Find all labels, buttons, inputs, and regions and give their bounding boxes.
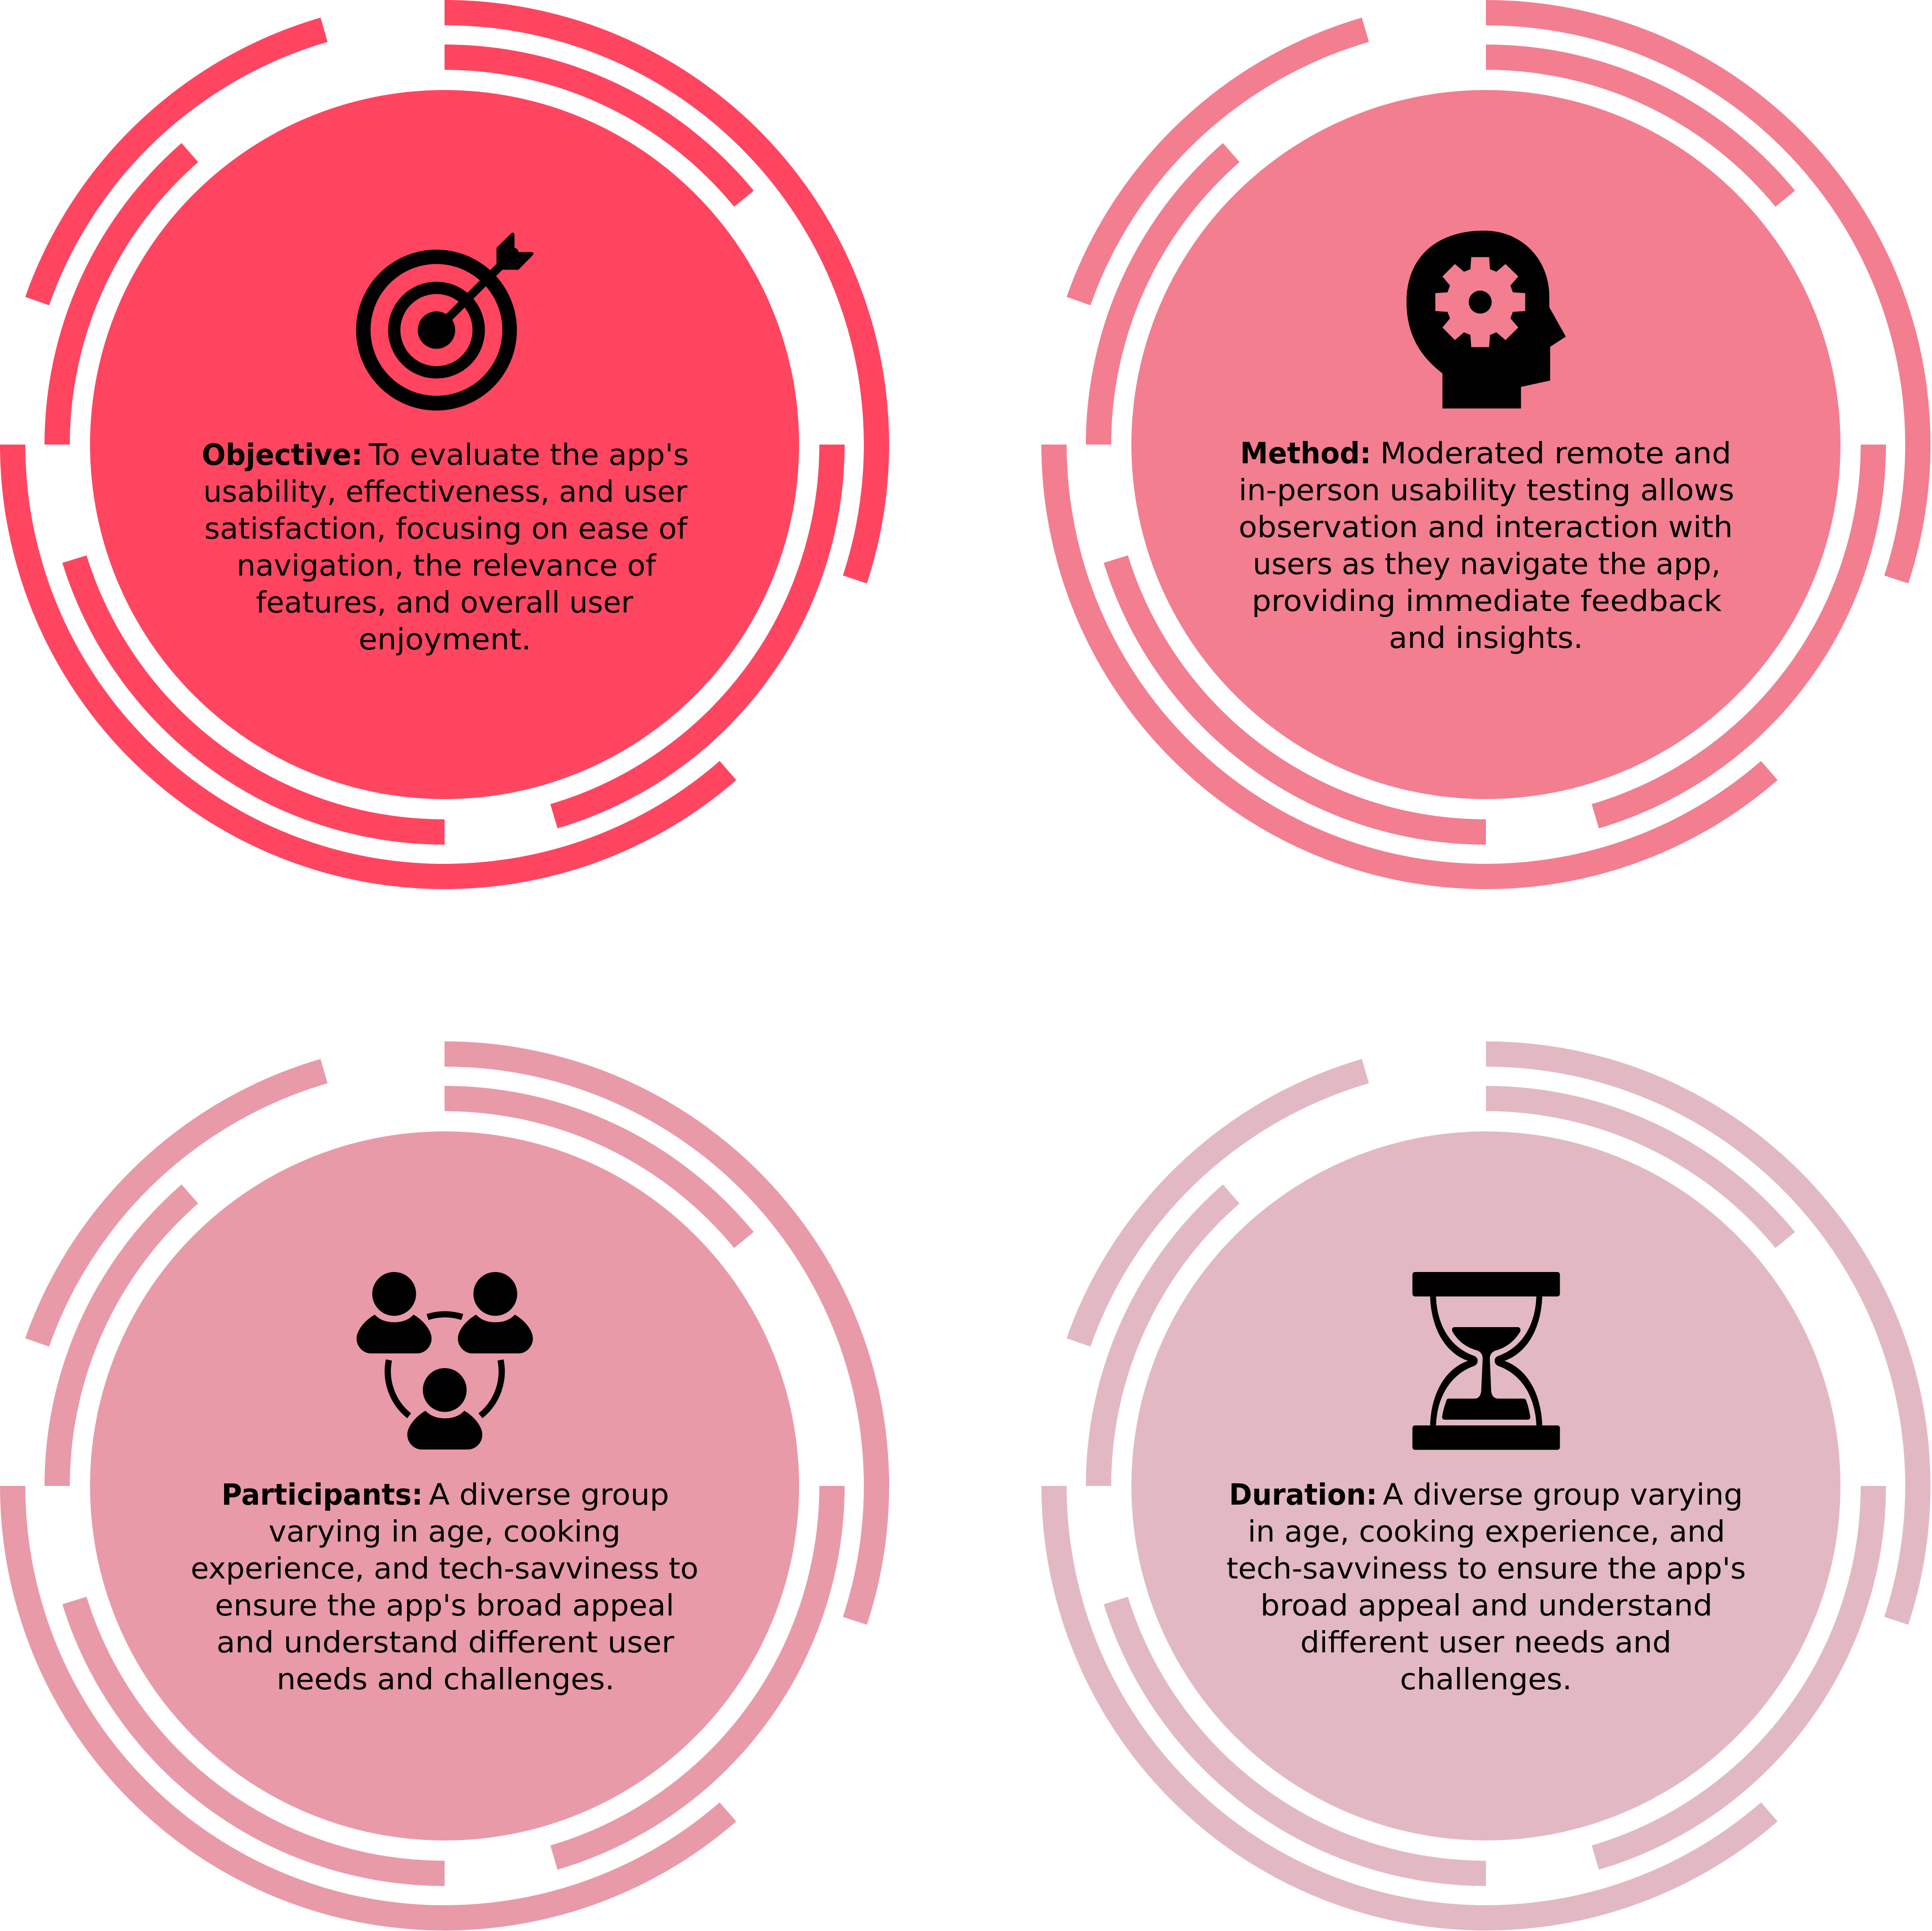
text: participants: experience, and tech-savviness to <box>191 1551 698 1586</box>
text: duration: Duration: <box>1229 1477 1377 1512</box>
text: participants: Participants: <box>222 1477 423 1512</box>
text: participants: A diverse group <box>429 1477 669 1512</box>
icon: head with gear <box>1407 231 1566 409</box>
text: duration: different user needs and <box>1300 1625 1672 1659</box>
text: method: providing immediate feedback <box>1252 584 1722 618</box>
text: duration: A diverse group varying <box>1383 1477 1743 1512</box>
central disc: objective <box>90 90 799 799</box>
text: participants <box>191 1477 698 1696</box>
panel: participants <box>13 1054 876 1918</box>
icon: three connected people <box>357 1272 533 1450</box>
central disc: participants <box>90 1131 799 1840</box>
text: duration: challenges. <box>1400 1662 1572 1696</box>
icon: hourglass <box>1413 1272 1560 1450</box>
rings: duration <box>1054 1054 1918 1918</box>
text: duration <box>1226 1477 1746 1696</box>
icon: target with arrow <box>356 233 534 411</box>
panel: duration <box>1054 1054 1918 1918</box>
text: method: Moderated remote and <box>1380 436 1731 470</box>
text: participants: needs and challenges. <box>277 1662 614 1696</box>
central disc: method <box>1131 90 1840 799</box>
text: objective: usability, effectiveness, and user <box>203 474 687 509</box>
text: participants: varying in age, cooking <box>269 1514 621 1549</box>
panel: objective <box>13 13 876 876</box>
text: duration: broad appeal and understand <box>1260 1588 1713 1622</box>
text: objective <box>202 437 689 656</box>
text: participants: and understand different user <box>216 1625 674 1659</box>
text: participants: ensure the app's broad appeal <box>215 1588 674 1622</box>
text: objective: satisfaction, focusing on ease of <box>204 511 688 546</box>
text: method: observation and interaction with <box>1239 510 1733 544</box>
text: method: and insights. <box>1389 621 1583 655</box>
text: duration: tech-savviness to ensure the app's <box>1226 1551 1746 1586</box>
rings: participants <box>13 1054 876 1918</box>
text: objective: navigation, the relevance of <box>237 548 657 583</box>
text: objective: enjoyment. <box>359 622 531 656</box>
text: method: Method: <box>1240 436 1371 470</box>
central disc: duration <box>1131 1131 1840 1840</box>
panel: method <box>1054 13 1918 876</box>
text: method <box>1239 436 1734 655</box>
text: method: in-person usability testing allows <box>1239 473 1734 507</box>
rings: method <box>1054 13 1918 876</box>
rings: objective <box>13 13 876 876</box>
text: objective: features, and overall user <box>256 585 633 620</box>
text: objective: To evaluate the app's <box>368 437 689 472</box>
text: method: users as they navigate the app, <box>1253 547 1721 581</box>
text: duration: in age, cooking experience, and <box>1248 1514 1725 1549</box>
text: objective: Objective: <box>202 437 363 472</box>
